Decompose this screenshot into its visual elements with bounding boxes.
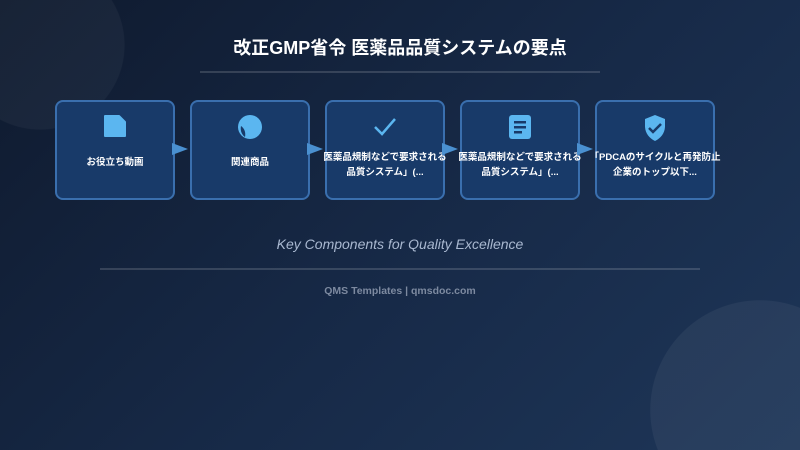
text: step 1: お役立ち動画	[86, 157, 144, 168]
text: step 3	[323, 152, 447, 178]
arrow 1	[172, 143, 188, 155]
text: step 5: 「PDCAのサイクルと再発防止	[590, 152, 720, 163]
text: step 5: 企業のトップ以下...	[613, 167, 697, 178]
icon: shield check	[645, 115, 665, 141]
panel: step 5	[595, 100, 715, 200]
arrow 2	[307, 143, 323, 155]
text: step 4	[458, 152, 582, 178]
title: 改正GMP省令 医薬品品質システムの要点	[233, 38, 567, 58]
arrow 4	[577, 143, 593, 155]
panel: step 1	[55, 100, 175, 200]
text: step 4: 医薬品規制などで要求される	[458, 152, 582, 163]
panel: step 4	[460, 100, 580, 200]
arrow 3	[442, 143, 458, 155]
icon: list document	[509, 115, 531, 139]
footer: QMS Templates | qmsdoc.com	[324, 285, 476, 297]
text: step 2: 関連商品	[231, 157, 269, 168]
text: step 5	[590, 152, 720, 178]
text: step 3: 医薬品規制などで要求される	[323, 152, 447, 163]
panel: step 3	[325, 100, 445, 200]
text: step 3: 品質システム」(...	[346, 167, 424, 178]
icon: leaf circle	[238, 115, 262, 139]
text: step 4: 品質システム」(...	[481, 167, 559, 178]
subtitle: Key Components for Quality Excellence	[277, 236, 523, 252]
panel: step 2	[190, 100, 310, 200]
icon: document	[104, 115, 126, 137]
icon: check	[374, 118, 396, 136]
